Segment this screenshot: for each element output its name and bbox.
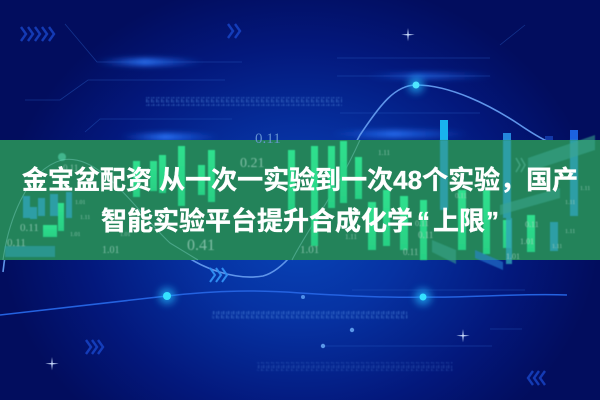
blue bars above band [440,120,578,145]
band number labels: 1.01 [75,200,86,206]
band number labels: 1.11 [378,149,390,157]
green highlight band [0,140,600,260]
band number labels: 1.01 [300,244,319,256]
sparkle stars [45,28,470,370]
band number labels: 0.11 [415,219,429,228]
band number labels: 1.11 [565,200,575,206]
band number labels: 1.11 [80,215,90,221]
band number labels: 1.11 [552,244,562,250]
band number labels: 1.01 [467,218,480,226]
rising curve line [3,85,600,277]
band number labels: 0.11 [7,237,26,249]
chevron marks [21,24,545,385]
band number labels: 0.11 [20,222,39,234]
curve through band [3,140,360,260]
title line 1: 金宝盆配资 从一次一实验到一次48个实验，国产 [22,165,578,195]
bar chart inside band [5,135,595,270]
band number labels: 1.01 [120,232,130,238]
band number labels: 0.41 [187,237,215,254]
band number labels [7,149,590,261]
band number labels: 1.01 [506,252,520,261]
band number labels: 0.11 [418,230,433,240]
top number label: 0.11 [255,131,281,147]
band number labels: 1.11 [580,186,590,192]
band number labels: 0.11 [525,220,539,229]
lower wave line [0,291,567,315]
slanted ribbon shapes [432,135,595,270]
band number labels: 1.11 [345,233,357,241]
band number labels: 1.01 [70,232,80,238]
glow flares [95,58,495,140]
band chevron [516,158,525,172]
title line 2: 智能实验平台提升合成化学“上限” [101,206,499,236]
band number labels: 0.21 [240,156,264,171]
glowing dots [58,77,431,348]
band number labels: 1.11 [565,229,575,235]
band number labels: 0.11 [403,247,418,257]
band number labels: 0.11 [63,163,78,173]
band number labels: 0.11 [455,192,467,200]
thin circuit lines [25,24,525,346]
binary digit rows [145,97,453,371]
band number labels: 1.01 [520,237,534,246]
band number labels: 1.01 [102,245,120,256]
lower band chevrons [210,268,227,282]
